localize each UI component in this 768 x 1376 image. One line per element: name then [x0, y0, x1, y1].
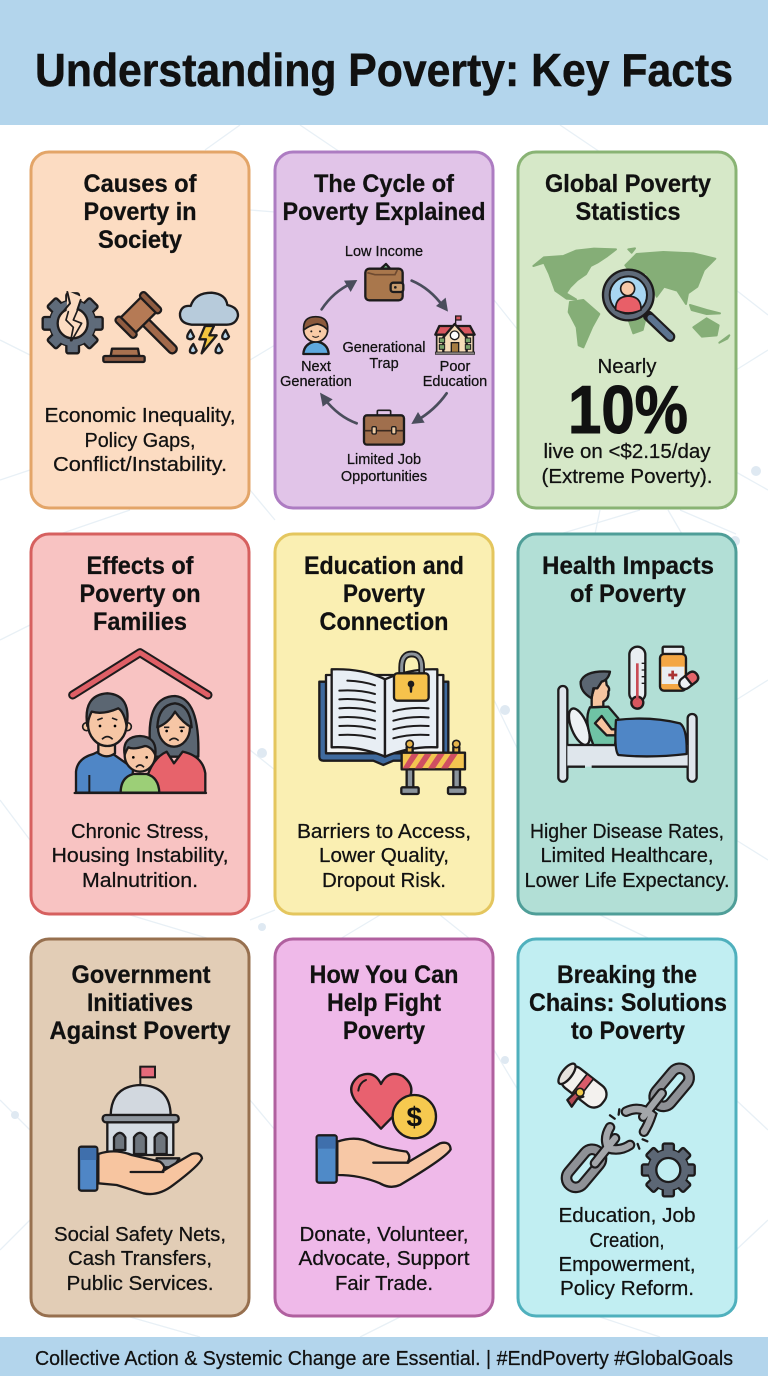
- panel: breaking the chains: [518, 939, 736, 1316]
- body text: government: [54, 1224, 226, 1295]
- icon: world map with magnifier: [533, 248, 729, 347]
- heading: effects: Effects of: [86, 552, 194, 580]
- icon: heart, coin and open hand: [317, 1074, 451, 1187]
- body text: help: Advocate, Support: [298, 1248, 470, 1270]
- cycle labels: Next: [301, 359, 331, 375]
- icon: locked book with barrier: [319, 654, 465, 794]
- panel: how you can help: [275, 939, 493, 1316]
- body text: help: [298, 1224, 470, 1295]
- body text: solutions: Education, Job: [558, 1205, 696, 1227]
- heading: cycle: The Cycle of: [314, 170, 455, 198]
- panel: global statistics: [518, 152, 736, 508]
- cycle labels: Generation: [280, 374, 352, 390]
- panel: government initiatives: [31, 939, 249, 1316]
- body text: government: Cash Transfers,: [68, 1248, 212, 1270]
- heading: solutions: to Poverty: [571, 1017, 685, 1045]
- heading: education: Education and: [304, 552, 464, 580]
- footer band: [0, 1337, 768, 1376]
- body text: statistics: live on <$2.15/day: [544, 441, 710, 463]
- body text: health: Limited Healthcare,: [540, 845, 714, 867]
- cycle labels: Generational: [342, 340, 426, 356]
- body text: government: Public Services.: [66, 1273, 214, 1295]
- heading: cycle: Poverty Explained: [282, 198, 486, 226]
- cycle labels: [280, 244, 487, 485]
- icon: patient in bed, thermometer, medicine: [558, 647, 700, 782]
- body text: causes: Conflict/Instability.: [53, 454, 227, 476]
- heading: help: How You Can: [310, 961, 458, 989]
- heading: causes: Society: [98, 226, 182, 254]
- body text: education: Dropout Risk.: [322, 870, 446, 892]
- body text: health: [524, 821, 730, 892]
- heading: education: Poverty: [343, 580, 425, 608]
- cycle labels: Opportunities: [341, 469, 427, 485]
- heading: government: Government: [72, 961, 211, 989]
- body text: solutions: [558, 1205, 696, 1300]
- cycle labels: Low Income: [345, 244, 423, 260]
- panel: effects on families: [31, 534, 249, 914]
- panel: causes of poverty: [31, 152, 249, 508]
- heading: help: Help Fight: [327, 989, 442, 1017]
- body text: effects: [52, 821, 228, 892]
- cycle labels: Education: [423, 374, 487, 390]
- heading: solutions: Breaking the: [557, 961, 697, 989]
- statistic: nearly 10%: 10%: [568, 372, 688, 448]
- heading: government: [50, 961, 231, 1045]
- body text: education: [297, 821, 471, 892]
- icon: capitol on open hand: [79, 1067, 202, 1194]
- heading: help: Poverty: [343, 1017, 425, 1045]
- cycle diagram: [280, 244, 487, 485]
- heading: government: Against Poverty: [50, 1017, 231, 1045]
- body text: causes: Economic Inequality,: [44, 405, 236, 427]
- heading: health: [542, 552, 714, 608]
- cycle labels: Limited Job: [347, 452, 421, 468]
- body text: health: Lower Life Expectancy.: [524, 870, 730, 892]
- panel: education connection: [275, 534, 493, 914]
- body text: education: Barriers to Access,: [297, 821, 471, 843]
- icon: worried family under roof: [73, 653, 208, 793]
- heading: help: [310, 961, 458, 1045]
- icon: heart, coin and open hand: $: [407, 1102, 423, 1133]
- heading: solutions: [529, 961, 727, 1045]
- cycle labels: Poor: [440, 359, 470, 375]
- panel: health impacts: [518, 534, 736, 914]
- statistic: nearly 10%: Nearly: [598, 356, 656, 378]
- body text: government: Social Safety Nets,: [54, 1224, 226, 1246]
- heading: statistics: Statistics: [576, 198, 680, 226]
- cycle labels: Trap: [369, 356, 399, 372]
- body text: help: Fair Trade.: [335, 1273, 433, 1295]
- body text: solutions: Creation,: [590, 1230, 664, 1252]
- body text: effects: Housing Instability,: [52, 845, 228, 867]
- body text: solutions: Policy Reform.: [560, 1278, 694, 1300]
- header band: [0, 0, 768, 125]
- heading: health: of Poverty: [570, 580, 686, 608]
- heading: effects: [80, 552, 200, 636]
- heading: effects: Families: [93, 608, 187, 636]
- heading: education: Connection: [320, 608, 448, 636]
- heading: effects: Poverty on: [80, 580, 200, 608]
- heading: cycle: [282, 170, 486, 226]
- footer text: Collective Action & Systemic Change are Essential. | #EndPoverty #GlobalGoals: [35, 1348, 733, 1370]
- body text: health: Higher Disease Rates,: [530, 821, 724, 843]
- body text: education: Lower Quality,: [319, 845, 449, 867]
- cycle arrows and icons: [303, 264, 475, 445]
- heading: statistics: [545, 170, 711, 226]
- heading: health: Health Impacts: [542, 552, 714, 580]
- body text: effects: Malnutrition.: [82, 870, 198, 892]
- icons: broken gear, gavel, storm cloud: [43, 291, 238, 367]
- heading: solutions: Chains: Solutions: [529, 989, 727, 1017]
- body text: causes: Policy Gaps,: [84, 430, 196, 452]
- heading: causes: Poverty in: [84, 198, 196, 226]
- body text: statistics: (Extreme Poverty).: [542, 466, 712, 488]
- heading: causes: Causes of: [84, 170, 197, 198]
- icon: broken chain, diploma, gear: [555, 1061, 695, 1196]
- heading: government: Initiatives: [87, 989, 193, 1017]
- panel: cycle of poverty: [275, 152, 493, 508]
- body text: help: Donate, Volunteer,: [300, 1224, 468, 1246]
- body text: solutions: Empowerment,: [558, 1254, 696, 1276]
- heading: statistics: Global Poverty: [545, 170, 711, 198]
- heading: causes: [84, 170, 197, 254]
- body text: statistics: [542, 441, 712, 488]
- heading: education: [304, 552, 464, 636]
- body text: causes: [44, 405, 236, 476]
- body text: effects: Chronic Stress,: [71, 821, 209, 843]
- title: Understanding Poverty: Key Facts: [35, 44, 733, 96]
